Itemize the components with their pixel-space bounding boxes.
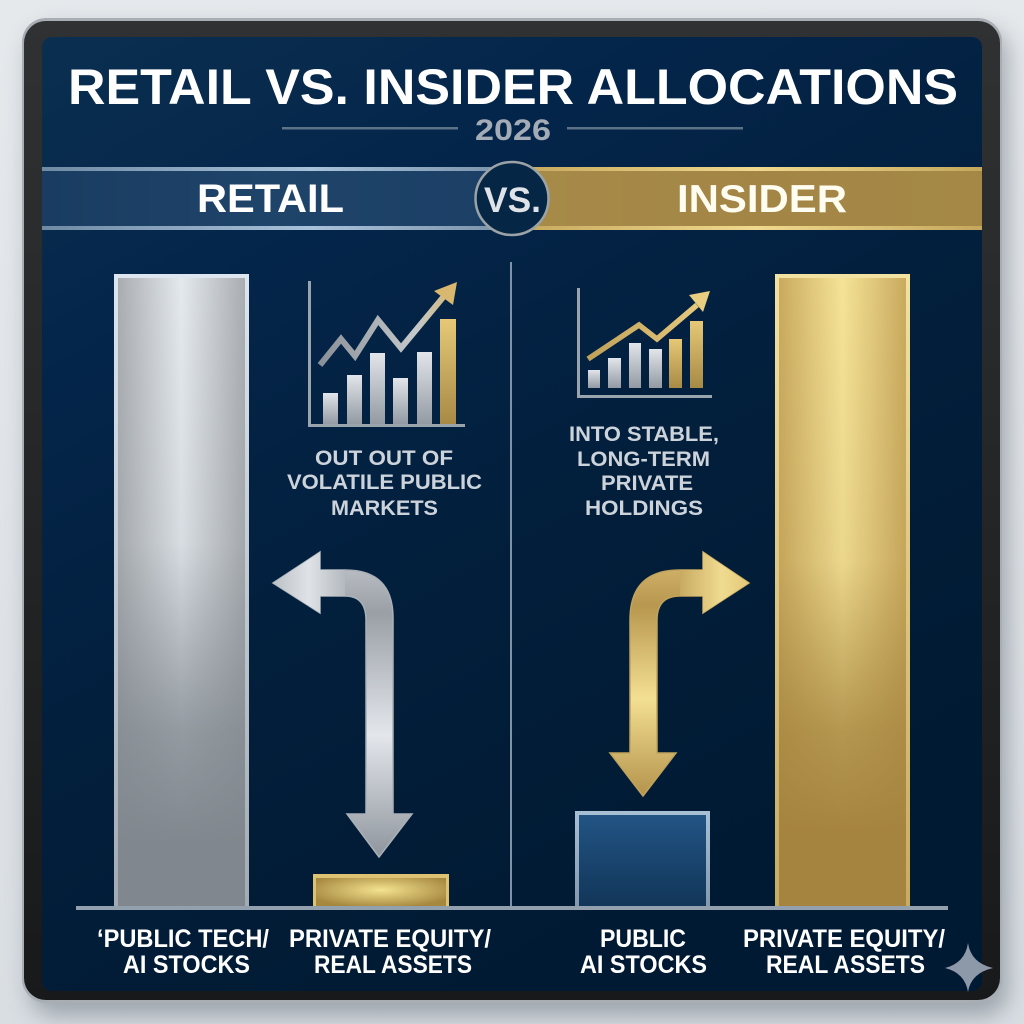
text: out of volatile public markets xyxy=(287,447,482,520)
label: retail private equity / real assets: PRIVATE EQUITY/ xyxy=(289,925,491,953)
text: into stable long-term private holdings: HOLDINGS xyxy=(585,497,703,520)
text: out of volatile public markets: VOLATILE PUBLIC xyxy=(287,471,482,494)
banner: insider: INSIDER xyxy=(677,178,847,221)
icon: insider chart xyxy=(577,288,712,398)
text: into stable long-term private holdings: LONG-TERM xyxy=(577,448,710,471)
label: public tech / ai stocks xyxy=(97,925,269,979)
text: out of volatile public markets: MARKETS xyxy=(331,497,438,520)
banner: retail xyxy=(42,167,492,230)
label: public tech / ai stocks: AI STOCKS xyxy=(123,951,250,979)
label: public ai stocks: PUBLIC xyxy=(600,925,686,953)
divider xyxy=(510,262,512,907)
title: RETAIL VS. INSIDER ALLOCATIONS xyxy=(68,59,958,115)
banner: insider xyxy=(532,167,982,230)
arrow: silver xyxy=(273,552,412,857)
text: into stable long-term private holdings: PRIVATE xyxy=(601,472,693,495)
bar: retail public tech xyxy=(114,274,249,908)
label: public ai stocks xyxy=(580,925,707,979)
vs badge: VS. xyxy=(484,181,541,220)
text: out of volatile public markets: OUT OUT OF xyxy=(315,447,453,470)
label: retail private equity / real assets xyxy=(289,925,491,979)
label: insider private equity / real assets: REAL ASSETS xyxy=(766,951,925,979)
label: retail private equity / real assets: REAL ASSETS xyxy=(314,951,472,979)
bar: insider private equity xyxy=(775,274,910,908)
icon: retail chart xyxy=(308,281,465,427)
label: public tech / ai stocks: ‘PUBLIC TECH/ xyxy=(97,925,269,953)
label: public ai stocks: AI STOCKS xyxy=(580,951,707,979)
text: into stable long-term private holdings: INTO STABLE, xyxy=(569,423,719,446)
label: insider private equity / real assets: PRIVATE EQUITY/ xyxy=(743,925,945,953)
bar: retail private equity xyxy=(313,874,449,908)
banner: retail: RETAIL xyxy=(197,177,344,221)
label: insider private equity / real assets xyxy=(743,925,945,979)
bar: insider public xyxy=(575,811,710,908)
icon: sparkle xyxy=(945,943,993,992)
baseline axis xyxy=(76,906,948,910)
vs badge xyxy=(476,162,548,235)
subtitle: year with rules: 2026 xyxy=(475,114,551,147)
arrow: gold xyxy=(610,552,749,796)
text: into stable long-term private holdings xyxy=(569,423,719,520)
